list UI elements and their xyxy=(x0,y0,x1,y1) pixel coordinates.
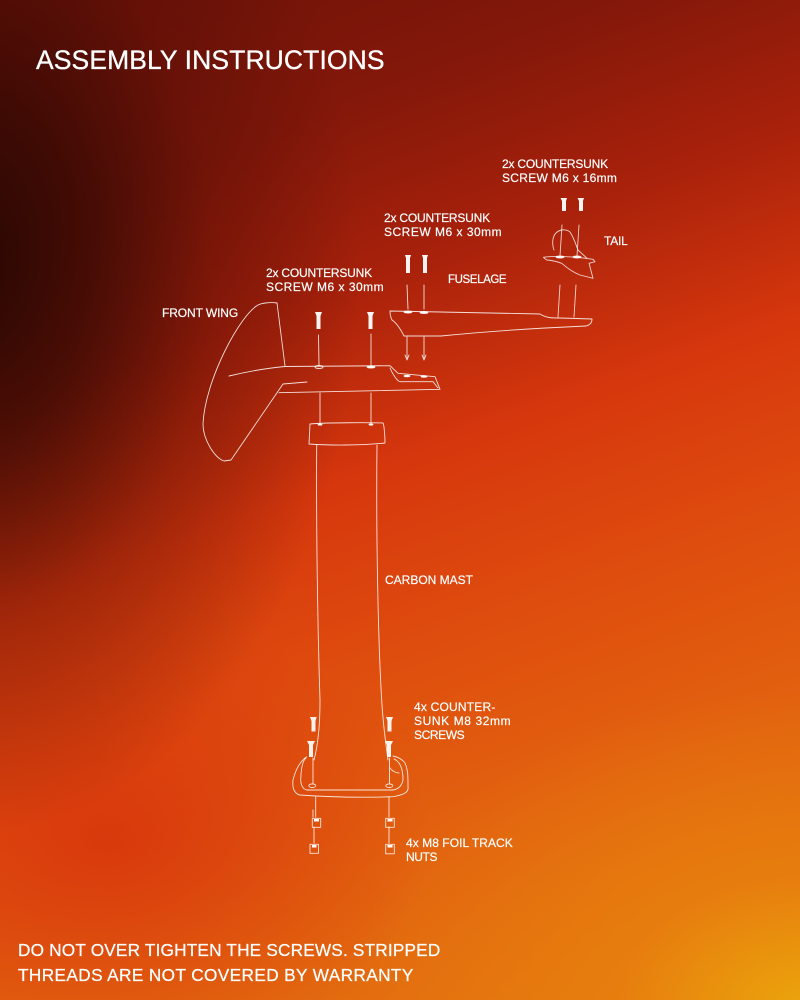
label: track nuts: NUTS xyxy=(406,850,437,864)
fuselage part xyxy=(390,285,592,360)
label: fuselage screws xyxy=(384,211,502,239)
label: track nuts: 4x M8 FOIL TRACK xyxy=(406,836,513,850)
label: carbon mast: CARBON MAST xyxy=(385,573,473,587)
label: front wing: FRONT WING xyxy=(162,306,238,320)
label: mast screws: SUNK M8 32mm xyxy=(414,714,511,728)
track nuts xyxy=(310,797,394,854)
label: track nuts xyxy=(406,836,513,864)
carbon mast xyxy=(309,423,388,760)
label: tail: TAIL xyxy=(604,234,628,248)
label: tail screws: SCREW M6 x 16mm xyxy=(502,171,617,185)
label: mast screws: SCREWS xyxy=(414,728,464,742)
label: mast screws xyxy=(414,700,511,742)
label: mast screws: 4x COUNTER- xyxy=(414,700,496,714)
label: front wing screws: 2x COUNTERSUNK xyxy=(266,266,372,280)
warning note: THREADS ARE NOT COVERED BY WARRANTY xyxy=(18,964,414,984)
label: fuselage: FUSELAGE xyxy=(448,274,506,286)
label: fuselage screws: SCREW M6 x 30mm xyxy=(384,225,502,239)
warning note xyxy=(18,940,440,984)
mast base plate xyxy=(293,756,408,797)
tail screws xyxy=(560,198,584,211)
label: fuselage screws: 2x COUNTERSUNK xyxy=(384,211,490,225)
fuselage screws xyxy=(405,255,428,273)
wing screws xyxy=(315,312,374,329)
title: ASSEMBLY INSTRUCTIONS xyxy=(36,45,385,75)
label: front wing screws: SCREW M6 x 30mm xyxy=(266,280,384,294)
tail part xyxy=(543,225,595,317)
label: front wing screws xyxy=(266,266,384,294)
label: tail screws: 2x COUNTERSUNK xyxy=(502,157,608,171)
mast screws xyxy=(307,717,393,757)
warning note: DO NOT OVER TIGHTEN THE SCREWS. STRIPPED xyxy=(18,940,440,960)
front wing part xyxy=(203,303,440,461)
label: tail screws xyxy=(502,157,617,185)
